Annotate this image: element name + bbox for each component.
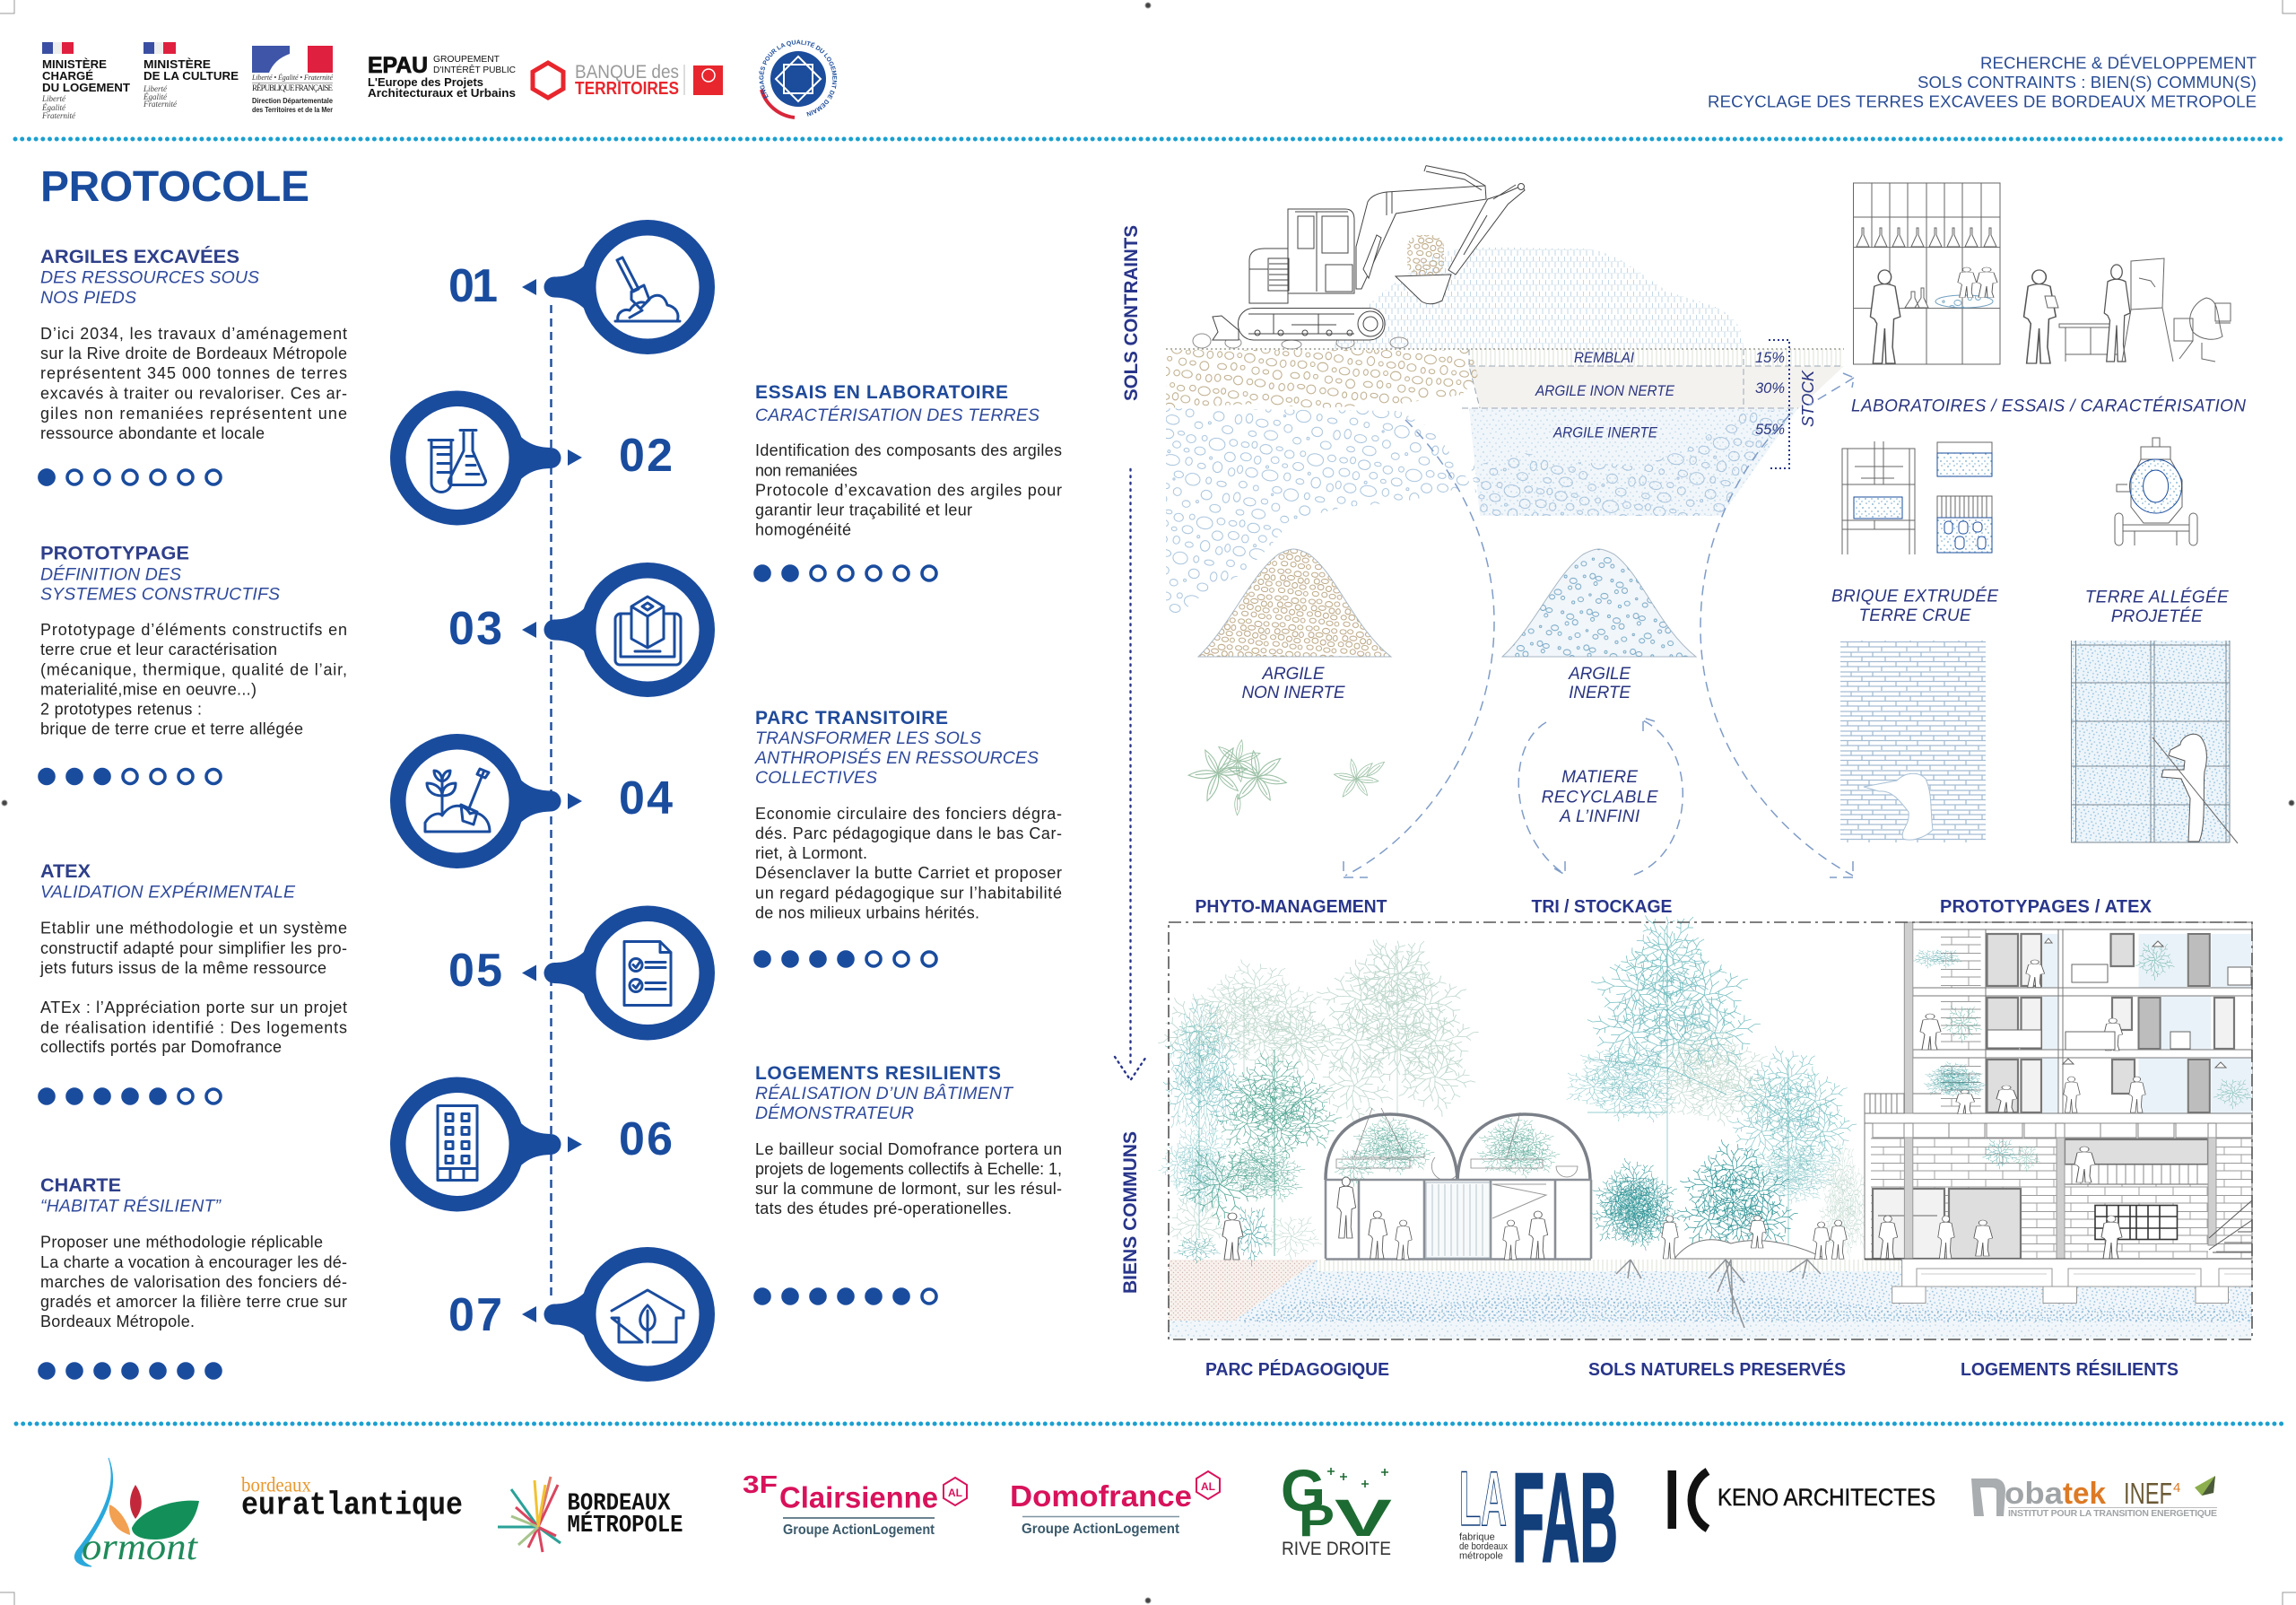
- percentages: 30%: [1755, 380, 1785, 397]
- tree: pale right: [1815, 1127, 1875, 1269]
- title: protocole: PROTOCOLE: [40, 163, 309, 211]
- upper floors base: [1904, 922, 2252, 1113]
- building: [1865, 922, 2253, 1303]
- pale tree: [1153, 947, 1356, 1100]
- logo: republique francaise: Liberté • Égalité • Fraternité: [251, 73, 333, 82]
- panel: logements resilients: [755, 1063, 1062, 1304]
- step 03: [448, 563, 715, 697]
- step 07: 07: [448, 1289, 502, 1341]
- logo: gpv rive droite: [1281, 1457, 1393, 1559]
- logo: ministere logement: Égalité: [41, 103, 66, 112]
- presenter: [2104, 265, 2130, 362]
- mezzanine panels: [2065, 1139, 2208, 1184]
- logo: la fab: [1459, 1446, 1618, 1590]
- plants: phyto: [1188, 729, 1387, 816]
- body text: Etablir une méthodologie et un système: [40, 920, 347, 938]
- body text: Le bailleur social Domofrance portera un: [755, 1140, 1062, 1158]
- strata labels: ARGILE INERTE: [1552, 425, 1658, 441]
- panel: parc transitoire: PARC TRANSITOIRE: [755, 708, 948, 728]
- logo: la fab: fabrique: [1459, 1532, 1495, 1543]
- recycling loop: [1518, 718, 1683, 875]
- columns: [1904, 922, 2216, 1259]
- logo: la fab: de bordeaux: [1459, 1541, 1508, 1552]
- timeline dashed axis: [550, 305, 552, 1298]
- captions bottom of section: LOGEMENTS RÉSILIENTS: [1961, 1359, 2179, 1380]
- logo: banque des territoires: [533, 62, 723, 99]
- percentages: 15%: [1755, 350, 1785, 366]
- logo: republique francaise: Direction Départementale: [252, 96, 333, 105]
- slabs: [1865, 929, 2252, 1123]
- table: [2059, 324, 2123, 362]
- stock label: STOCK: [1799, 370, 1817, 427]
- ground floor people: [1879, 1147, 2122, 1259]
- stairs: [2209, 1200, 2252, 1252]
- label: [1241, 665, 1345, 702]
- panel: logements resilients: LOGEMENTS RESILIENTS: [755, 1063, 1001, 1084]
- sample with voids: [1937, 496, 1992, 553]
- label: MATIERE: [1561, 768, 1638, 787]
- icon: checklist document: [624, 942, 671, 1005]
- pile: argile inerte: [1502, 549, 1696, 702]
- step 07: [448, 1247, 715, 1382]
- lab technicians: [1977, 267, 1997, 298]
- body text: materialité,mise en oeuvre...): [40, 681, 257, 699]
- body text: D’ici 2034, les travaux d’aménagement: [40, 325, 347, 343]
- vertical label: sols contraints: SOLS CONTRAINTS: [1121, 225, 1142, 401]
- ground floor base: [1865, 1123, 2252, 1260]
- logo: bordeaux metropole: BORDEAUX: [567, 1491, 671, 1518]
- bottom dotted separator: [16, 1421, 2283, 1426]
- windows level 1: [1987, 1060, 2210, 1112]
- progress dots: [39, 1364, 221, 1378]
- hanging planters: [1333, 1108, 1578, 1189]
- logo: domofrance: Domofrance: [1010, 1479, 1192, 1513]
- panel: charte: CHARTE: [40, 1175, 121, 1196]
- caption: terre allegee: TERRE ALLÉGÉE: [2085, 589, 2229, 606]
- step 02: [390, 391, 673, 526]
- logo: ministere culture: MINISTÈRE: [144, 57, 211, 71]
- body text: riet, à Lormont.: [755, 844, 867, 862]
- panel: parc transitoire: TRANSFORMER LES SOLS: [755, 728, 981, 748]
- logo: lormont: [74, 1458, 199, 1568]
- label: INERTE: [1569, 684, 1631, 702]
- logo: nobatek inef4: INEF: [2124, 1477, 2172, 1510]
- logo: clairsienne: [743, 1470, 967, 1538]
- logo: gpv rive droite: V: [1335, 1489, 1393, 1548]
- brick press machine: [1842, 441, 1992, 554]
- logo: EPAU: D'INTÉRÊT PUBLIC: [433, 64, 516, 75]
- darker soil band: [1238, 1295, 2252, 1322]
- strata labels: ARGILE INON NERTE: [1535, 383, 1675, 399]
- logo: clairsienne: AL: [948, 1487, 962, 1499]
- logo: EPAU: L'Europe des Projets: [368, 75, 483, 89]
- panel: essais en laboratoire: ESSAIS EN LABORATOIRE: [755, 382, 1008, 403]
- panel: argiles excavees: NOS PIEDS: [40, 288, 136, 308]
- ground plants: [1162, 1193, 1324, 1269]
- caption: brique extrudee: [1831, 587, 1998, 625]
- grid window: [2095, 1206, 2178, 1240]
- mound with people: [1662, 1216, 1847, 1260]
- icon: apartment building: [438, 1105, 477, 1181]
- body text: dés. Parc pédagogique dans le bas Car-: [755, 824, 1062, 842]
- greenhouse: [1326, 1108, 1591, 1260]
- rocks: inert clay right: [1471, 408, 1794, 516]
- body text: gradés et amorcer la filière terre crue sur: [40, 1293, 347, 1311]
- lab shelves: [1853, 183, 2000, 364]
- panel: essais en laboratoire: [755, 382, 1062, 580]
- panel: prototypage: [39, 544, 347, 784]
- body text: [39, 920, 347, 1056]
- step 01: [448, 220, 715, 354]
- body text: brique de terre crue et terre allégée: [40, 720, 303, 738]
- panel: prototypage: DÉFINITION DES: [40, 563, 181, 585]
- remblai hatch: [1169, 1260, 1318, 1321]
- logo: ministere culture: Égalité: [143, 92, 168, 101]
- windows level 2: [1987, 998, 2234, 1049]
- header logos: [41, 39, 838, 120]
- progress dots: [39, 770, 221, 784]
- ground floor brick: [1871, 1138, 2252, 1258]
- stones on bench: [1935, 295, 1993, 308]
- captions bottom of section: [1205, 1359, 2179, 1380]
- body text: ressource abondante et locale: [40, 424, 265, 442]
- panel: argiles excavees: [39, 247, 347, 484]
- band: argile non inerte: [1469, 366, 1844, 408]
- curtain door: [1426, 1182, 1490, 1258]
- logo: seal: ENGAGÉS POUR LA QUALITÉ DU LOGEMENT DE DEMAIN: [759, 39, 838, 117]
- label: A L’INFINI: [1559, 807, 1640, 826]
- pale tall tree: [1300, 924, 1496, 1133]
- logo: EPAU: EPAU: [368, 53, 428, 78]
- progress dots: [755, 1289, 936, 1304]
- step 03: 03: [448, 603, 502, 655]
- footer logos: FAB: [1512, 1446, 1618, 1590]
- logo: ministere culture: Fraternité: [143, 100, 178, 109]
- logo: EPAU: GROUPEMENT: [433, 54, 500, 65]
- tree: big teal: [1539, 910, 1790, 1256]
- logo: ministere logement: MINISTÈRE: [42, 57, 107, 71]
- shrub: dark teal: [1578, 1147, 1699, 1268]
- logo: nobatek inef4: tek: [2063, 1477, 2106, 1511]
- logo: gpv rive droite: RIVE DROITE: [1282, 1539, 1391, 1559]
- header title: RECYCLAGE DES TERRES EXCAVEES DE BORDEAUX METROPOLE: [1708, 92, 2257, 111]
- flipchart: [2122, 258, 2173, 362]
- captions top of section: [1195, 897, 2152, 917]
- panel: atex: VALIDATION EXPÉRIMENTALE: [40, 881, 296, 903]
- hanging plants: [1980, 1138, 2041, 1173]
- step 01: 01: [448, 260, 498, 312]
- body text: de nos milieux urbains hérités.: [755, 904, 979, 922]
- panel: logements resilients: RÉALISATION D’UN BÂTIMENT: [755, 1083, 1014, 1103]
- body text: Bordeaux Métropole.: [40, 1313, 195, 1330]
- fill band: [1318, 1260, 1900, 1271]
- structure: [1326, 1180, 1591, 1260]
- stock mound: [1332, 248, 1744, 349]
- person with laptop: [2024, 270, 2056, 363]
- body text: Identification des composants des argiles: [755, 441, 1062, 459]
- tree: dark green: [1176, 1042, 1355, 1256]
- roots: [1616, 1260, 1821, 1328]
- panel: prototypage: SYSTEMES CONSTRUCTIFS: [40, 585, 280, 605]
- logo: ministere logement: Liberté: [41, 94, 66, 103]
- logo: clairsienne: Groupe ActionLogement: [783, 1522, 935, 1538]
- caption: terre allegee: [2085, 589, 2229, 626]
- pile: argile non inerte: [1198, 549, 1391, 702]
- soil section: [1169, 1260, 2252, 1339]
- brick strips: [1941, 929, 1981, 1113]
- progress dots: [39, 1089, 221, 1103]
- logo: republique francaise: [251, 46, 334, 114]
- sprayer worker: [2161, 734, 2206, 842]
- icon: shovel and soil: [615, 257, 680, 321]
- logo: banque des territoires: BANQUE des: [575, 62, 679, 83]
- percentages: [1755, 350, 1785, 438]
- body text: giles non remaniées représentent une: [40, 405, 347, 423]
- logo: ministere logement: DU LOGEMENT: [42, 81, 130, 94]
- excavated soil in bucket: [1407, 235, 1444, 275]
- label: ARGILE: [1568, 665, 1631, 684]
- logo: la fab: LA: [1459, 1456, 1507, 1542]
- label: RECYCLABLE: [1542, 788, 1658, 807]
- captions top of section: TRI / STOCKAGE: [1532, 897, 1672, 917]
- rocks: inert clay left: [1166, 408, 1471, 624]
- tree: teal right: [1718, 1032, 1881, 1256]
- people at work: [2024, 258, 2231, 363]
- logo: nobatek inef4: 4: [2173, 1480, 2180, 1496]
- body text: un regard pédagogique sur l’habitabilité: [755, 885, 1062, 903]
- panel: essais en laboratoire: CARACTÉRISATION DES TERRES: [755, 405, 1039, 425]
- band: argile inerte: [1469, 408, 1798, 516]
- flasks: [1905, 288, 1928, 308]
- band: remblai: [1469, 349, 1844, 366]
- panel: atex: ATEX: [40, 861, 91, 882]
- body text: constructif adapté pour simplifier les pro-: [40, 939, 347, 957]
- logo: ministere culture: [143, 42, 239, 109]
- arched roof: [1326, 1114, 1590, 1180]
- header title: SOLS CONTRAINTS : BIEN(S) COMMUN(S): [1918, 73, 2257, 92]
- progress dots: [39, 470, 221, 484]
- body text: excavés à traiter ou revaloriser. Ces ar-: [40, 384, 347, 402]
- spraying machine: [2115, 438, 2197, 545]
- logo: EPAU: [368, 53, 516, 100]
- logo: domofrance: [1010, 1471, 1220, 1537]
- awning: [1492, 1184, 1546, 1218]
- body text: homogénéité: [755, 521, 851, 539]
- header title: RECHERCHE & DÉVELOPPEMENT: [1980, 54, 2257, 72]
- progress dots: [755, 566, 936, 580]
- step 04: 04: [619, 772, 673, 824]
- panel: argiles excavees: ARGILES EXCAVÉES: [40, 247, 239, 267]
- beam panels: [1873, 1123, 2252, 1138]
- sample: [1937, 442, 1992, 476]
- logo: domofrance: Groupe ActionLogement: [1022, 1522, 1180, 1537]
- foundations: [1892, 1260, 2252, 1303]
- logo: ministere logement: Fraternité: [41, 111, 76, 120]
- body text: non remaniées: [755, 462, 857, 480]
- body text: Economie circulaire des fonciers dégra-: [755, 805, 1062, 823]
- panel: argiles excavees: DES RESSOURCES SOUS: [40, 267, 259, 287]
- body text: garantir leur traçabilité et leur: [755, 502, 972, 519]
- body text: ATEx : l’Appréciation porte sur un projet: [40, 999, 347, 1016]
- logo: bordeaux metropole: MÉTROPOLE: [567, 1511, 683, 1540]
- furniture: [1987, 938, 2251, 1068]
- strata labels: REMBLAI: [1574, 350, 1634, 366]
- caption: brique extrudee: TERRE CRUE: [1858, 606, 1971, 625]
- label: NON INERTE: [1241, 684, 1345, 702]
- body text: 2 prototypes retenus :: [40, 701, 202, 719]
- step 06: [390, 1077, 673, 1211]
- progress dots: [755, 952, 936, 966]
- brick wall: [1840, 641, 1986, 842]
- body text: marches de valorisation des fonciers dé-: [40, 1273, 347, 1291]
- logo: keno architectes: [1668, 1470, 1935, 1529]
- label: [1542, 768, 1658, 826]
- lab worker: [1870, 270, 1900, 363]
- body text: sur la Rive droite de Bordeaux Métropole: [40, 345, 347, 362]
- logo: gpv rive droite: P: [1299, 1496, 1335, 1546]
- body text: [40, 325, 347, 442]
- balcony plants: [1911, 940, 2253, 1111]
- tinted rooms: [2043, 934, 2252, 1113]
- panel: charte: “HABITAT RÉSILIENT”: [40, 1195, 222, 1217]
- body text: jets futurs issus de la même ressource: [39, 959, 326, 977]
- body text: Désenclaver la butte Carriet et proposer: [755, 864, 1062, 882]
- captions top of section: PROTOTYPAGES / ATEX: [1940, 897, 2152, 917]
- body text: représentent 345 000 tonnes de terres: [40, 364, 347, 382]
- section frame: [1169, 922, 2252, 1339]
- body text: [40, 1234, 347, 1330]
- earth panel: [2072, 641, 2238, 843]
- body text: [755, 441, 1062, 539]
- body text: [755, 1140, 1062, 1217]
- tree: teal left: [1139, 978, 1265, 1242]
- panel: parc transitoire: COLLECTIVES: [755, 768, 877, 788]
- body text: [40, 621, 347, 738]
- step 05: 05: [448, 945, 502, 997]
- dashed flow arrows: [1344, 373, 1854, 877]
- icon: lab flask and tube: [429, 431, 486, 492]
- label: ARGILE: [1261, 665, 1325, 684]
- people in greenhouse: [1337, 1177, 1548, 1260]
- body text: terre crue et leur caractérisation: [40, 641, 277, 659]
- arrow: sols contraints to biens communs: [1115, 469, 1146, 1080]
- body text: de réalisation identifié : Des logements: [40, 1018, 347, 1036]
- logo: bordeaux metropole: [498, 1477, 683, 1552]
- logo: republique francaise: RÉPUBLIQUE FRANÇAISE: [252, 83, 334, 92]
- panel: parc transitoire: [754, 708, 1062, 966]
- step 06: 06: [619, 1113, 673, 1165]
- seated person: [2174, 298, 2231, 362]
- body text: projets de logements collectifs à Echelle: 1,: [755, 1160, 1062, 1178]
- logo: domofrance: AL: [1201, 1480, 1215, 1493]
- mason figure: [1864, 773, 1933, 840]
- logo: ministere culture: Liberté: [143, 84, 168, 93]
- icon: plant and spade: [425, 769, 490, 832]
- windows level 3: [1987, 934, 2210, 986]
- panel: atex: [39, 861, 347, 1103]
- body text: Proposer une méthodologie réplicable: [40, 1234, 323, 1252]
- body text: La charte a vocation à encourager les dé-: [40, 1253, 347, 1271]
- logo: lormont: ormont: [82, 1527, 198, 1568]
- lab caption: LABORATOIRES / ESSAIS / CARACTÉRISATION: [1851, 397, 2246, 416]
- stock bracket: [1769, 340, 1789, 468]
- logo: clairsienne: 3F: [743, 1470, 778, 1498]
- icon: prototype block on plan: [615, 597, 681, 665]
- strata labels: [1535, 350, 1675, 441]
- step 04: [390, 734, 673, 868]
- logo: nobatek inef4: [1971, 1476, 2217, 1519]
- body text: [755, 805, 1062, 922]
- captions bottom of section: PARC PÉDAGOGIQUE: [1205, 1359, 1389, 1380]
- shrub: dark: [1668, 1127, 1811, 1269]
- terrace railing: [1865, 1094, 1941, 1113]
- caption: terre allegee: PROJETÉE: [2111, 607, 2203, 626]
- body text: Protocole d’excavation des argiles pour: [755, 482, 1062, 500]
- panel: charte: [39, 1175, 347, 1378]
- trees: pale group: [1153, 924, 1496, 1133]
- captions top of section: PHYTO-MANAGEMENT: [1195, 897, 1387, 917]
- occupants: [1920, 960, 2145, 1113]
- body text: sur la commune de lormont, sur les résul-: [755, 1180, 1062, 1198]
- icon: house with leaf: [612, 1290, 683, 1342]
- captions bottom of section: SOLS NATURELS PRESERVÉS: [1588, 1359, 1846, 1380]
- soil strata diagram: [1166, 248, 1844, 624]
- body text: Prototypage d’éléments constructifs en: [40, 621, 347, 639]
- storefront windows: [1873, 1189, 2021, 1259]
- logo: republique francaise: des Territoires et de la Mer: [252, 105, 334, 114]
- logo: ministere culture: DE LA CULTURE: [144, 69, 239, 83]
- logo: keno architectes: KENO ARCHITECTES: [1718, 1484, 1935, 1511]
- step 02: 02: [619, 430, 673, 482]
- rocks: non inert clay: [1166, 350, 1478, 408]
- step 05: [448, 906, 715, 1041]
- logo: la fab: métropole: [1459, 1550, 1503, 1561]
- header title: [1708, 54, 2257, 111]
- vertical label: biens communs: BIENS COMMUNS: [1120, 1131, 1141, 1294]
- footer logos: [74, 1446, 2217, 1590]
- logo: euratlantique: bordeaux: [241, 1473, 311, 1496]
- percentages: 55%: [1755, 422, 1785, 438]
- logo: euratlantique: [241, 1473, 463, 1523]
- logo: nobatek inef4: INSTITUT POUR LA TRANSITION ENERGETIQUE: [2008, 1508, 2217, 1519]
- caption: brique extrudee: BRIQUE EXTRUDÉE: [1831, 587, 1998, 606]
- body text: collectifs portés par Domofrance: [40, 1038, 282, 1056]
- logo: ministere logement: [41, 42, 130, 120]
- logo: ministere logement: CHARGÉ: [42, 69, 93, 83]
- panel: parc transitoire: ANTHROPISÉS EN RESSOURCES: [754, 747, 1039, 768]
- logo: gpv rive droite: G: [1281, 1457, 1326, 1523]
- panel: logements resilients: DÉMONSTRATEUR: [755, 1103, 914, 1123]
- body text: (mécanique, thermique, qualité de l’air,: [40, 660, 347, 678]
- excavator: [1213, 166, 1525, 340]
- logo: euratlantique: euratlantique: [241, 1487, 463, 1523]
- body text: tats des études pré-operationelles.: [755, 1199, 1012, 1217]
- logo: banque des territoires: TERRITOIRES: [575, 79, 679, 99]
- label: [1568, 665, 1631, 702]
- logo: nobatek inef4: oba: [2005, 1477, 2064, 1511]
- gardener: [1222, 1213, 1243, 1260]
- panel: prototypage: PROTOTYPAGE: [40, 544, 189, 563]
- top dotted separator: [15, 136, 2283, 142]
- logo: EPAU: Architecturaux et Urbains: [368, 86, 516, 100]
- logo: clairsienne: Clairsienne: [779, 1480, 938, 1514]
